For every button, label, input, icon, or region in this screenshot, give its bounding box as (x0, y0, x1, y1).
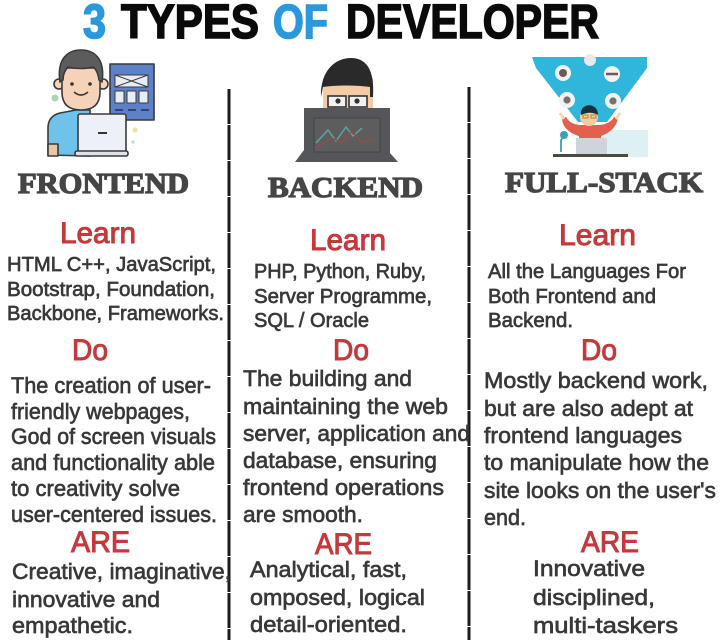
text: frontend are: empathetic. (12, 613, 133, 638)
text: backend do (243, 366, 470, 527)
heading: full-stack are: ARE (581, 526, 639, 559)
text: backend do: frontend operations (243, 475, 444, 500)
heading: full-stack learn: Learn (559, 219, 636, 252)
text: frontend are: innovative and (12, 587, 160, 612)
heading: backend are: ARE (315, 528, 372, 561)
icon: frontend developer (48, 50, 154, 156)
text: frontend learn: Backbone, Frameworks. (7, 303, 224, 325)
heading: frontend: FRONTEND (18, 168, 189, 200)
heading: backend: BACKEND (268, 172, 423, 204)
heading: backend do: Do (333, 334, 369, 367)
text: backend do: are smooth. (243, 502, 363, 527)
text: frontend learn (7, 254, 224, 325)
text: backend do: The building and (243, 366, 412, 391)
column: full-stack (484, 167, 716, 638)
text: frontend do: friendly webpages, (11, 399, 190, 424)
text: backend do: server, application and (243, 421, 470, 446)
text: frontend learn: Bootstrap, Foundation, (7, 279, 215, 301)
text: full-stack do (484, 368, 716, 530)
text: full-stack are: disciplined, (533, 585, 655, 610)
text: full-stack are: Innovative (533, 556, 645, 581)
text: full-stack learn: All the Languages For (488, 261, 686, 283)
text: full-stack are (533, 556, 678, 638)
text: frontend are: Creative, imaginative, (12, 559, 231, 584)
text: full-stack do: Mostly backend work, (484, 368, 708, 393)
text: frontend learn: HTML C++, JavaScript, (7, 254, 216, 276)
text: full-stack do: but are also adept at (484, 396, 694, 421)
text: full-stack are: multi-taskers (533, 613, 678, 638)
text: full-stack do: frontend languages (484, 423, 682, 448)
text: backend learn (254, 261, 432, 332)
text: frontend do: The creation of user- (11, 373, 211, 398)
title (83, 0, 599, 49)
text: frontend do: God of screen visuals (11, 424, 216, 449)
column: frontend (7, 168, 231, 638)
text: backend are: omposed, logical (250, 585, 425, 610)
heading: frontend do: Do (72, 334, 108, 367)
text: full-stack learn: Both Frontend and (488, 286, 656, 308)
text: frontend do (11, 373, 217, 527)
text: backend learn: Server Programme, (254, 286, 432, 308)
text: backend do: database, ensuring (243, 448, 437, 473)
text: frontend are (12, 559, 231, 638)
column: backend (243, 172, 470, 637)
text: full-stack learn: Backend. (488, 310, 573, 332)
text: frontend do: user-centered issues. (11, 502, 217, 527)
text: backend learn: PHP, Python, Ruby, (254, 261, 426, 283)
text: backend do: maintaining the web (243, 394, 448, 419)
text: frontend do: and functionality able (11, 450, 215, 475)
text: backend are: Analytical, fast, (250, 557, 407, 582)
divider: left (228, 89, 230, 640)
text: full-stack do: to manipulate how the (484, 450, 709, 475)
text: backend are (250, 557, 425, 637)
heading: full-stack: FULL-STACK (505, 167, 703, 199)
text: full-stack do: end. (484, 505, 526, 530)
icon: full-stack developer (532, 54, 648, 157)
divider: right (468, 87, 470, 640)
text: full-stack learn (488, 261, 686, 332)
icon: backend developer (295, 58, 398, 162)
text: backend are: detail-oriented. (250, 612, 407, 637)
text: backend learn: SQL / Oracle (254, 310, 369, 332)
text: full-stack do: site looks on the user's (484, 478, 716, 503)
text: frontend do: to creativity solve (11, 476, 180, 501)
heading: full-stack do: Do (581, 334, 617, 367)
heading: backend learn: Learn (310, 224, 386, 257)
heading: frontend are: ARE (71, 526, 130, 559)
heading: frontend learn: Learn (60, 217, 136, 250)
